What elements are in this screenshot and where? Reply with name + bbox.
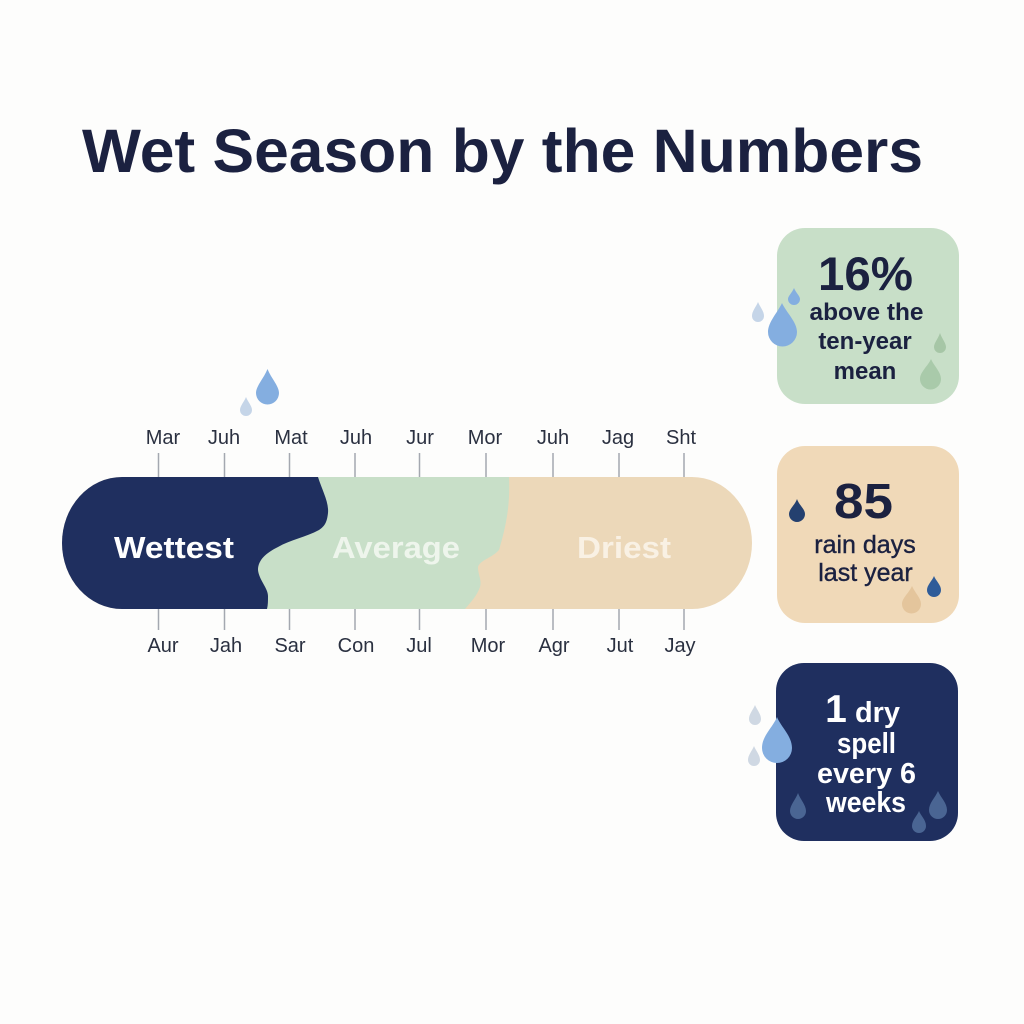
- icon: drops: [789, 499, 941, 614]
- bottom month axis: Jul: [406, 635, 432, 657]
- icon: dark drops: [790, 791, 947, 833]
- top month axis: Juh: [340, 427, 372, 449]
- text: rain days last year: [814, 531, 916, 587]
- text: above the ten-year mean: [810, 299, 924, 385]
- icon: green drops: [920, 333, 946, 390]
- bottom month axis: Sar: [274, 635, 306, 657]
- top month axis: [146, 427, 696, 477]
- bottom month axis: Con: [338, 635, 374, 657]
- text: 1 dry spell every 6 weeks: [817, 688, 916, 819]
- text: above the ten-year mean: ten-year: [818, 328, 912, 355]
- bottom month axis: Jay: [664, 635, 696, 657]
- top month axis: Jur: [406, 427, 434, 449]
- bottom month axis: Aur: [147, 635, 179, 657]
- label: driest: Driest: [577, 530, 671, 565]
- season bar: [50, 477, 752, 609]
- stat: 16%: 16%: [818, 247, 913, 300]
- icon: light drops: [748, 705, 792, 766]
- panel: 16% stat card: [752, 228, 959, 404]
- bottom month axis: Jah: [210, 635, 242, 657]
- top month axis: Mar: [146, 427, 181, 449]
- top month axis: Sht: [666, 427, 696, 449]
- top month axis: Jag: [602, 427, 634, 449]
- top month axis: Mat: [274, 427, 308, 449]
- text: 1 dry spell every 6 weeks: dry: [855, 697, 900, 729]
- label: average: Average: [332, 530, 460, 565]
- text: 1 dry spell every 6 weeks: spell: [837, 728, 896, 760]
- top month axis: Juh: [537, 427, 569, 449]
- text: rain days last year: rain days: [814, 531, 916, 559]
- bottom month axis: Jut: [607, 635, 634, 657]
- icon: rain drops above timeline: [240, 369, 279, 416]
- text: 1 dry spell every 6 weeks: weeks: [825, 787, 906, 819]
- top month axis: Juh: [208, 427, 240, 449]
- bottom month axis: Mor: [471, 635, 506, 657]
- panel: 85 stat card: [777, 446, 959, 623]
- text: rain days last year: last year: [818, 559, 913, 587]
- stat: 85: 85: [834, 475, 893, 529]
- panel: dry spell stat card: [748, 663, 958, 841]
- icon: blue drops: [752, 288, 800, 346]
- text: 1 dry spell every 6 weeks: every 6: [817, 758, 916, 790]
- title: Wet Season by the Numbers: [82, 117, 923, 185]
- label: wettest: Wettest: [114, 530, 234, 565]
- top month axis: Mor: [468, 427, 503, 449]
- text: above the ten-year mean: mean: [834, 358, 896, 385]
- bottom month axis: [147, 609, 696, 657]
- text: 1 dry spell every 6 weeks: 1: [825, 688, 847, 731]
- text: above the ten-year mean: above the: [810, 299, 924, 326]
- bottom month axis: Agr: [538, 635, 570, 657]
